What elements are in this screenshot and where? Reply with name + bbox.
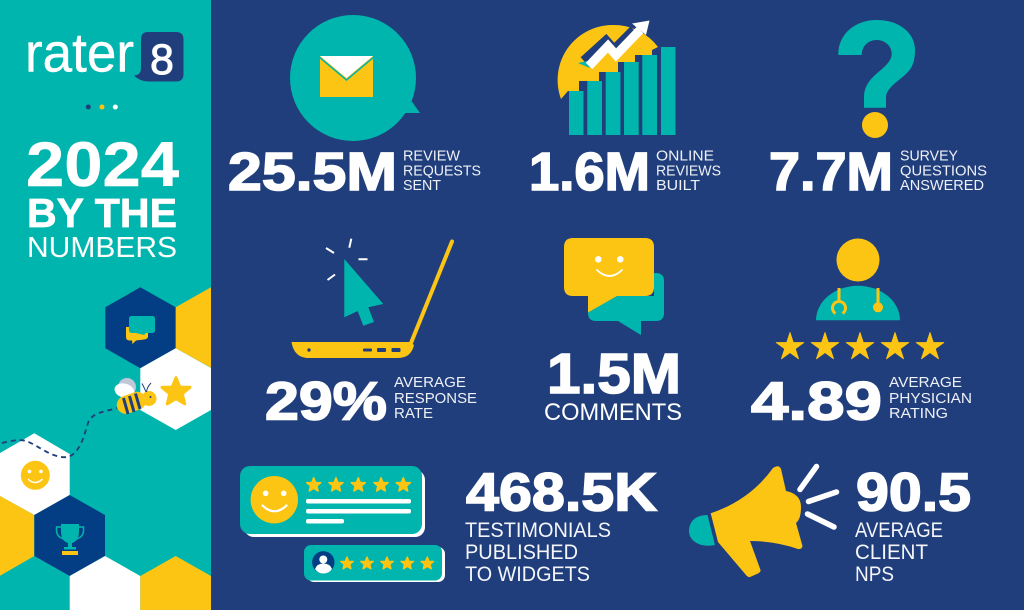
bee flight path bbox=[2, 408, 117, 457]
heading: 2024 by the numbers bbox=[26, 130, 179, 264]
hexagon: yellow bottom bbox=[140, 556, 211, 610]
icon: email bubble bbox=[290, 15, 420, 141]
heading: 2024 by the numbers: 2024 bbox=[26, 130, 179, 200]
stat: survey questions bbox=[769, 142, 987, 202]
stat: survey questions: SURVEY bbox=[900, 148, 958, 164]
hexagon: navy chat bbox=[105, 287, 176, 368]
hexagon: yellow left bbox=[0, 496, 34, 576]
stat: comments: COMMENTS bbox=[544, 399, 682, 426]
decorative dots bbox=[86, 104, 118, 110]
icon: question mark bbox=[838, 20, 915, 138]
stat: nps: NPS bbox=[855, 563, 894, 586]
stat: physician rating: PHYSICIAN bbox=[889, 390, 972, 407]
stat: testimonials: TESTIMONIALS bbox=[465, 519, 611, 542]
stat: testimonials: PUBLISHED bbox=[465, 541, 578, 564]
stat: review requests: 25.5M bbox=[228, 142, 397, 202]
icon: large review card bbox=[240, 466, 425, 537]
stat: response rate: AVERAGE bbox=[394, 374, 466, 391]
hexagon: yellow upper bbox=[176, 287, 211, 368]
stat: response rate bbox=[265, 372, 477, 432]
icon: growth chart bbox=[558, 20, 676, 135]
icon: laptop with cursor bbox=[292, 239, 452, 358]
logo: rater8: 8 bbox=[150, 36, 174, 84]
stat: review requests: SENT bbox=[403, 177, 441, 194]
stat: online reviews: ONLINE bbox=[656, 148, 714, 164]
stat: review requests: REQUESTS bbox=[403, 162, 481, 180]
stat: online reviews: REVIEWS bbox=[656, 162, 721, 180]
icon: small review card bbox=[304, 545, 445, 582]
hexagon: white star bbox=[140, 348, 211, 430]
stat: nps: 90.5 bbox=[856, 462, 971, 522]
stat: review requests: REVIEW bbox=[403, 148, 461, 164]
icon: bee bbox=[113, 378, 156, 416]
stat: survey questions: QUESTIONS bbox=[900, 162, 987, 180]
stat: nps: CLIENT bbox=[855, 541, 928, 564]
icon: physician bbox=[816, 238, 900, 320]
hexagon: white smiley bbox=[0, 433, 70, 515]
stat: survey questions: 7.7M bbox=[769, 142, 893, 202]
stat: physician rating: RATING bbox=[889, 405, 948, 422]
stat: survey questions: ANSWERED bbox=[900, 177, 984, 194]
hexagon: white bottom bbox=[70, 556, 140, 610]
stat: physician rating bbox=[751, 372, 972, 432]
heading: 2024 by the numbers: NUMBERS bbox=[27, 232, 177, 264]
stat: testimonials: 468.5K bbox=[466, 462, 657, 522]
hexagon: navy trophy bbox=[34, 495, 105, 576]
stat: comments: 1.5M bbox=[547, 342, 681, 406]
stat: online reviews: BUILT bbox=[656, 177, 700, 194]
icon: chat bubbles bbox=[564, 238, 664, 335]
stat: testimonials: TO WIDGETS bbox=[465, 563, 590, 586]
stat: response rate: RATE bbox=[394, 405, 433, 422]
stat: response rate: 29% bbox=[265, 372, 387, 432]
stat: review requests bbox=[228, 142, 481, 202]
stat: nps bbox=[855, 462, 971, 586]
stat: online reviews: 1.6M bbox=[529, 142, 650, 202]
logo: rater8: rater bbox=[25, 22, 134, 84]
stat: testimonials bbox=[465, 462, 657, 586]
panel: sidebar bbox=[0, 0, 211, 610]
heading: 2024 by the numbers: BY THE bbox=[27, 190, 177, 236]
stat: comments bbox=[544, 342, 682, 426]
physician star rating bbox=[776, 332, 944, 359]
icon: megaphone bbox=[689, 466, 836, 577]
stat: nps: AVERAGE bbox=[855, 519, 943, 542]
stat: physician rating: 4.89 bbox=[751, 372, 882, 432]
stat: physician rating: AVERAGE bbox=[889, 374, 962, 391]
stat: response rate: RESPONSE bbox=[394, 390, 477, 407]
stat: online reviews bbox=[529, 142, 721, 202]
